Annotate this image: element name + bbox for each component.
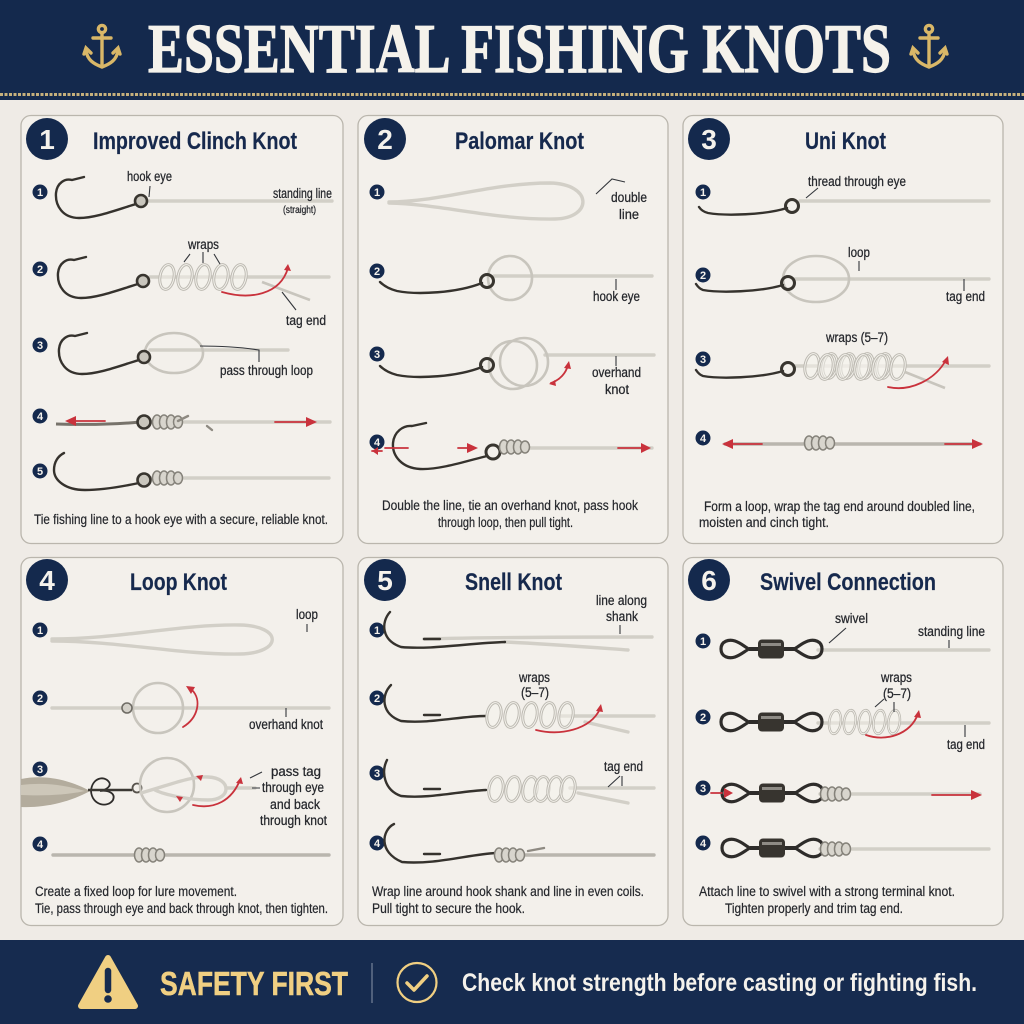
description: Pull tight to secure the hook. <box>372 901 525 916</box>
step 2 <box>696 670 989 752</box>
step 4 <box>32 836 329 862</box>
step 1: standing line <box>273 186 332 201</box>
step 2: wraps <box>518 670 550 685</box>
step 3 <box>370 759 654 803</box>
step 3: through eye <box>262 780 324 795</box>
number badge 2 <box>364 118 406 160</box>
step 2: 2 <box>37 264 43 276</box>
step 1 <box>696 174 989 215</box>
header banner <box>0 0 1024 100</box>
heading: Snell Knot <box>465 569 562 596</box>
step 1: 1 <box>37 625 43 637</box>
step 1: thread through eye <box>808 174 906 189</box>
description: Tie fishing line to a hook eye with a secure, reliable knot. <box>34 512 328 527</box>
number badge 5 <box>364 559 406 601</box>
heading: Loop Knot <box>130 569 227 596</box>
step 1: 1 <box>37 187 43 199</box>
step 4 <box>696 430 983 450</box>
step 2 <box>370 256 652 304</box>
step 2: (5–7) <box>883 686 911 701</box>
icon: check circle <box>398 963 436 1002</box>
footer banner <box>0 940 1024 1024</box>
step 2: tag end <box>947 737 985 752</box>
description <box>382 498 638 530</box>
step 3: knot <box>605 382 629 397</box>
description: Tie, pass through eye and back through knot, then tighten. <box>35 901 328 916</box>
icon: spoon lure <box>21 777 142 807</box>
step 3 <box>696 780 982 802</box>
panel: palomar knot <box>358 116 668 544</box>
panel: uni knot <box>683 116 1003 544</box>
step 2: hook eye <box>593 289 640 304</box>
step 2: 2 <box>374 693 380 705</box>
step 1: standing line <box>918 624 985 639</box>
step 4: 4 <box>700 433 707 445</box>
description <box>699 884 955 916</box>
step 3: 3 <box>700 354 706 366</box>
number badge 4: 4 <box>39 565 55 596</box>
safety first label: SAFETY FIRST <box>160 965 348 1002</box>
number badge 6: 6 <box>701 565 717 596</box>
icon: right anchor <box>911 25 947 67</box>
description: moisten and cinch tight. <box>699 515 829 530</box>
step 3 <box>370 338 654 397</box>
step 2: tag end <box>946 289 985 304</box>
heading: Palomar Knot <box>455 128 584 155</box>
description <box>372 884 644 916</box>
step 3: pass tag <box>271 764 321 779</box>
heading: Uni Knot <box>805 128 886 155</box>
step 4: 4 <box>37 411 44 423</box>
description: through loop, then pull tight. <box>438 515 573 530</box>
step 2: loop <box>848 245 870 260</box>
step 5: 5 <box>37 466 43 478</box>
step 4: 4 <box>37 839 44 851</box>
step 2: 2 <box>700 270 706 282</box>
step 3: tag end <box>604 759 643 774</box>
step 2: 2 <box>37 693 43 705</box>
step 4: 4 <box>374 437 381 449</box>
step 4: 4 <box>700 838 707 850</box>
number badge 4 <box>26 559 68 601</box>
step 3 <box>32 333 313 378</box>
panel: improved clinch knot <box>21 116 343 544</box>
step 4 <box>370 824 654 863</box>
step 3: and back <box>270 797 320 812</box>
step 1: double <box>611 190 647 205</box>
number badge 1 <box>26 118 68 160</box>
step 3: 3 <box>374 768 380 780</box>
step 1: line along <box>596 593 647 608</box>
step 1 <box>370 179 647 222</box>
step 3 <box>696 330 989 388</box>
number badge 6 <box>688 559 730 601</box>
step 2: overhand knot <box>249 717 323 732</box>
step 1: 1 <box>374 187 380 199</box>
number badge 5: 5 <box>377 565 393 596</box>
description: Double the line, tie an overhand knot, pass hook <box>382 498 638 513</box>
description <box>699 499 975 530</box>
step 2: wraps <box>880 670 912 685</box>
description: Form a loop, wrap the tag end around doubled line, <box>704 499 975 514</box>
step 1: line <box>619 207 639 222</box>
step 1 <box>370 593 652 650</box>
panel: loop knot <box>21 558 343 926</box>
step 1: (straight) <box>283 205 316 216</box>
step 4 <box>696 836 989 858</box>
number badge 1: 1 <box>39 124 55 155</box>
heading: Swivel Connection <box>760 569 936 596</box>
heading: Improved Clinch Knot <box>93 128 297 155</box>
description: Tighten properly and trim tag end. <box>725 901 903 916</box>
panel: swivel connection <box>683 558 1003 926</box>
step 1 <box>32 169 332 218</box>
step 2: 2 <box>700 712 706 724</box>
step 1: 1 <box>374 625 380 637</box>
step 3: 3 <box>700 783 706 795</box>
number badge 3 <box>688 118 730 160</box>
step 3: through knot <box>260 813 327 828</box>
step 3: 3 <box>37 764 43 776</box>
step 5 <box>32 453 329 490</box>
step 1: 1 <box>700 636 706 648</box>
step 4 <box>370 423 652 469</box>
step 3: pass through loop <box>220 363 313 378</box>
step 4 <box>32 408 330 430</box>
step 2: 2 <box>374 266 380 278</box>
step 2 <box>696 245 989 304</box>
step 1 <box>32 607 318 654</box>
description <box>35 884 328 916</box>
step 1: loop <box>296 607 318 622</box>
panel: snell knot <box>358 558 668 926</box>
step 4: 4 <box>374 838 381 850</box>
step 3: 3 <box>37 340 43 352</box>
step 2: wraps <box>187 237 219 252</box>
icon: warning triangle <box>81 958 135 1006</box>
step 3 <box>21 758 327 828</box>
step 1: 1 <box>700 187 706 199</box>
description: Create a fixed loop for lure movement. <box>35 884 237 899</box>
description: Wrap line around hook shank and line in even coils. <box>372 884 644 899</box>
step 1 <box>696 611 989 658</box>
step 3: wraps (5–7) <box>825 330 888 345</box>
description: Attach line to swivel with a strong terminal knot. <box>699 884 955 899</box>
step 3: overhand <box>592 365 641 380</box>
step 3: 3 <box>374 349 380 361</box>
step 2: (5–7) <box>521 685 549 700</box>
number badge 2: 2 <box>377 124 393 155</box>
step 1: swivel <box>835 611 868 626</box>
step 1: shank <box>606 609 638 624</box>
icon: left anchor <box>84 25 120 67</box>
step 2 <box>32 683 329 733</box>
step 2: tag end <box>286 313 326 328</box>
step 2 <box>370 670 654 732</box>
step 2 <box>32 237 329 328</box>
number badge 3: 3 <box>701 124 717 155</box>
step 1: hook eye <box>127 169 172 184</box>
